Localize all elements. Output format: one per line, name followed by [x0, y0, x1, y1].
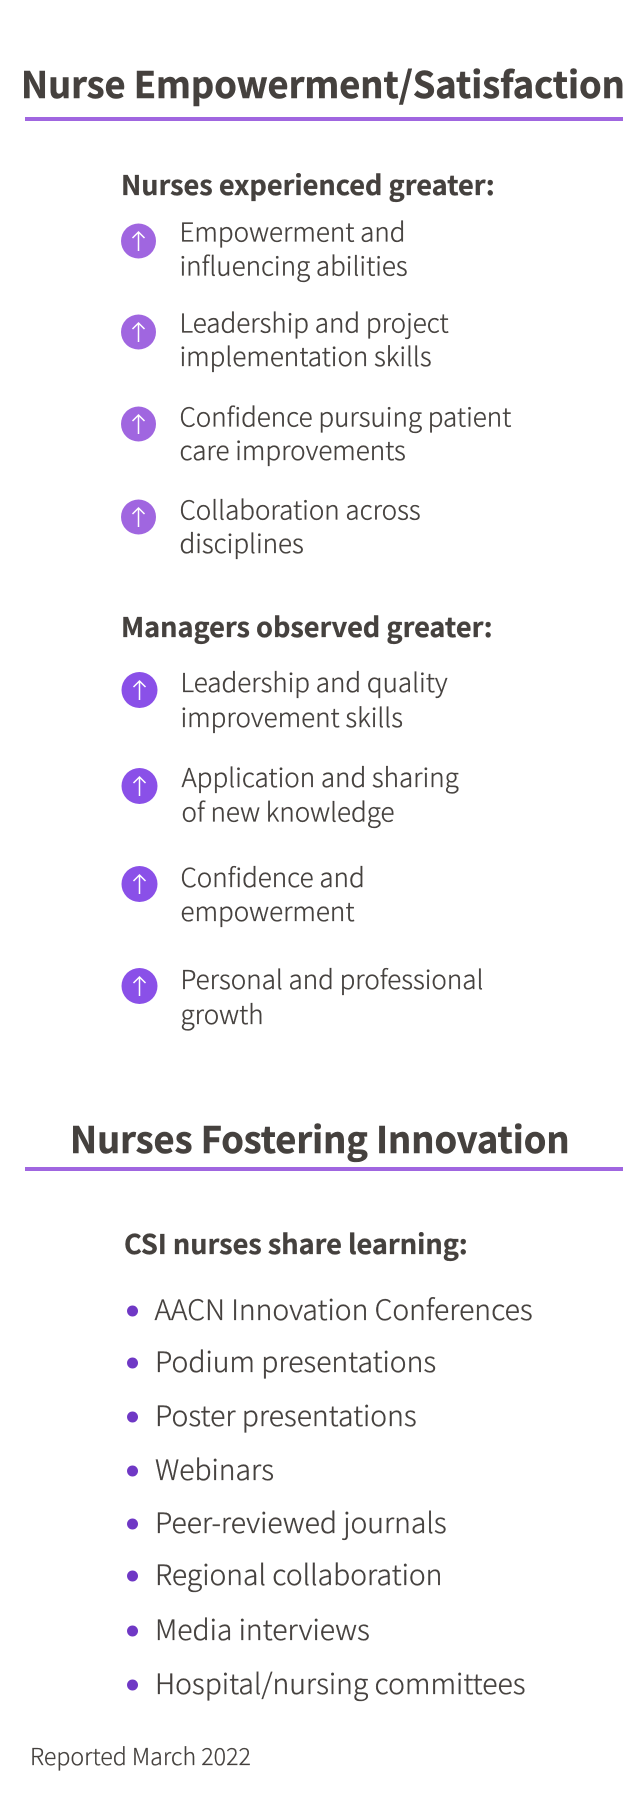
- bullet list: Regional collaboration: [155, 1553, 442, 1594]
- bullet list: Poster presentations: [155, 1394, 417, 1435]
- item: leadership: [121, 304, 449, 374]
- footer note: Reported March 2022: [30, 1738, 251, 1772]
- item: confidence: Confidence pursuing patient: [180, 398, 511, 434]
- subheading: nurses: Nurses experienced greater:: [121, 164, 495, 203]
- item: confidence and empowerment: empowerment: [180, 892, 354, 929]
- item: leadership and quality: [122, 663, 448, 735]
- item: collaboration: Collaboration across: [180, 490, 421, 528]
- bullet list: AACN Innovation Conferences: [154, 1288, 533, 1329]
- item: collaboration: disciplines: [180, 524, 304, 561]
- bullet list: Hospital/nursing committees: [155, 1662, 526, 1703]
- item: confidence: care improvements: [180, 431, 406, 468]
- subheading: CSI: CSI nurses share learning:: [124, 1223, 468, 1262]
- item: growth: [122, 960, 483, 1032]
- item: growth: Personal and professional: [180, 960, 483, 997]
- bullet list: Podium presentations: [155, 1340, 436, 1381]
- item: leadership and quality: Leadership and quality: [180, 663, 448, 700]
- item: application: of new knowledge: [182, 792, 395, 830]
- panel: managers observed greater: [121, 606, 493, 1032]
- item: confidence and empowerment: Confidence and: [180, 858, 365, 895]
- item: confidence and empowerment: [122, 858, 365, 929]
- bullet list: Peer-reviewed journals: [155, 1501, 447, 1542]
- panel: nurses experienced greater: [121, 164, 511, 561]
- subheading: managers: Managers observed greater:: [121, 606, 493, 645]
- item: collaboration: [121, 490, 421, 561]
- bullet list: [127, 1288, 533, 1703]
- bullet list: Webinars: [155, 1448, 274, 1489]
- item: leadership and quality: improvement skills: [180, 698, 403, 735]
- item: application: [122, 758, 459, 830]
- panel: CSI nurses share learning: [124, 1223, 533, 1703]
- bullet list: Media interviews: [155, 1608, 370, 1649]
- item: application: Application and sharing: [182, 758, 459, 795]
- item: empowerment: influencing abilities: [180, 246, 408, 284]
- item: leadership: implementation skills: [180, 337, 432, 374]
- item: empowerment: [121, 212, 408, 284]
- heading: Nurse Empowerment/Satisfaction: Nurse Empowerment/Satisfaction: [21, 57, 625, 109]
- heading: Nurses Fostering Innovation: Nurses Fostering Innovation: [70, 1112, 570, 1164]
- item: leadership: Leadership and project: [180, 304, 449, 340]
- item: empowerment: Empowerment and: [180, 212, 405, 250]
- item: confidence: [121, 398, 511, 468]
- item: growth: growth: [180, 995, 264, 1032]
